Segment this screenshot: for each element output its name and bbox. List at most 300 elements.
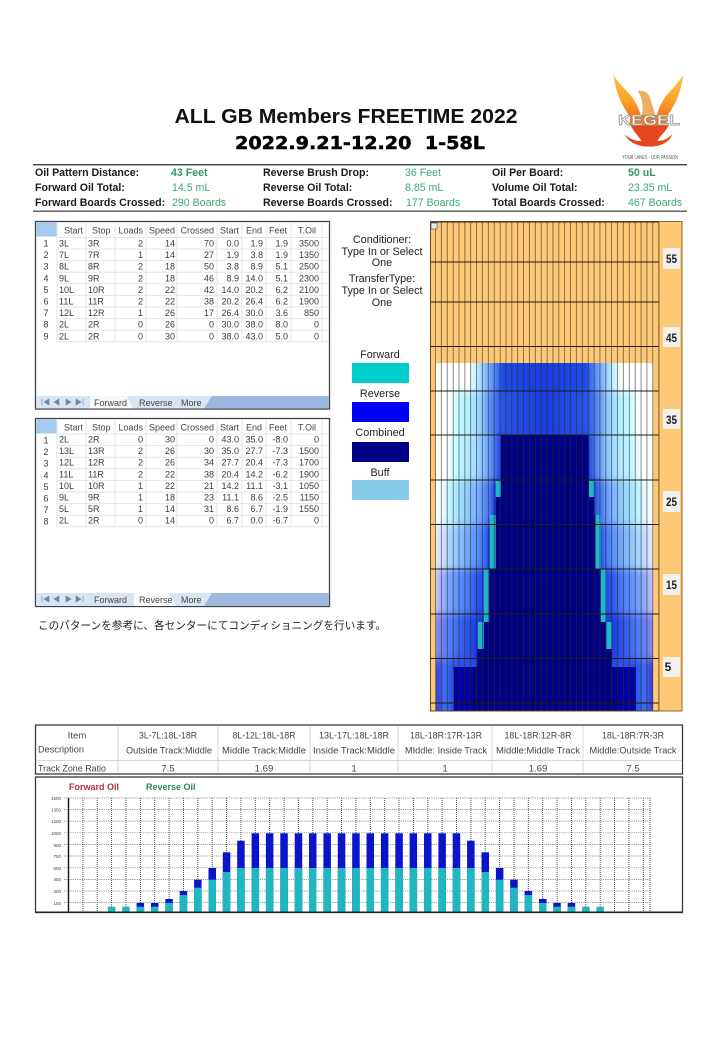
conditioner label: One [372, 257, 392, 269]
legend: combined [352, 427, 409, 462]
oil density bands [436, 363, 653, 710]
forward rows: 5 [43, 285, 49, 295]
stat: forward oil total [35, 182, 210, 194]
forward rows: 0 [209, 320, 214, 330]
reverse rows: 6.7 [250, 504, 263, 514]
column: inside track right: 18L-18R:17R-13R [410, 730, 482, 742]
forward rows: 1 [138, 308, 143, 318]
track zone ratio table [36, 725, 682, 774]
stat: volume oil total [492, 182, 672, 194]
forward rows: 22 [165, 285, 175, 295]
forward rows: 9R [88, 273, 100, 283]
reverse rows: 43.0 [221, 434, 239, 444]
stat: oil pattern distance: 43 Feet [171, 167, 208, 179]
lane oil graph [430, 221, 682, 740]
column: inside track left: Inside Track:Middle [313, 746, 395, 756]
forward rows: 2 [43, 250, 49, 260]
reverse rows: 2R [88, 516, 100, 526]
forward rows: 27 [204, 250, 214, 260]
legend: buff: Buff [370, 467, 391, 479]
forward rows: 1.9 [275, 238, 288, 248]
column: outside track left [126, 730, 212, 774]
reverse rows: 31 [204, 504, 214, 514]
forward rows: 7 [43, 308, 49, 318]
forward-only edge strips [478, 481, 612, 649]
reverse rows: -3.1 [272, 481, 288, 491]
y axis labels: 1350 [51, 808, 61, 812]
forward rows: 3 [43, 262, 49, 272]
forward rows: 1350 [299, 250, 319, 260]
stat: oil pattern distance [35, 167, 208, 179]
sheet tabs: reverse active [36, 593, 329, 606]
reverse rows: 2 [138, 458, 143, 468]
reverse rows: 0 [314, 516, 319, 526]
reverse rows: 9R [88, 492, 100, 502]
reverse rows: 1 [138, 481, 143, 491]
reverse rows: 14.2 [221, 481, 239, 491]
forward rows: 3500 [299, 238, 319, 248]
stat: reverse boards crossed: 177 Boards [406, 197, 460, 209]
sheet tabs: reverse active: Forward [94, 595, 127, 605]
column: inside track left [313, 730, 395, 774]
stat: total boards crossed: Total Boards Crossed: [492, 197, 605, 209]
row labels: Track Zone Ratio [38, 764, 106, 774]
forward rows: 5.1 [275, 262, 288, 272]
reverse rows: 0 [314, 434, 319, 444]
forward rows: 3.8 [250, 250, 263, 260]
stat: reverse oil total: Reverse Oil Total: [263, 182, 352, 194]
reverse rows: 14 [165, 516, 175, 526]
reverse rows: 1900 [299, 469, 319, 479]
reverse oil bars [137, 833, 575, 912]
column: inside track left: 1 [351, 764, 357, 774]
panel: oil bar chart [36, 777, 682, 912]
forward rows: 5.0 [275, 331, 288, 341]
forward rows: 2 [138, 273, 143, 283]
forward rows: 14 [165, 250, 175, 260]
combined oil core [454, 435, 636, 711]
forward rows: 20.2 [245, 285, 263, 295]
stat: reverse boards crossed [263, 197, 460, 209]
stat: forward oil total: 14.5 mL [172, 182, 210, 194]
reverse rows: 13L [59, 446, 74, 456]
forward rows: 9 [43, 331, 49, 341]
forward rows: 8 [43, 320, 49, 330]
forward oil bars [108, 868, 604, 912]
distance markers: 15 [666, 578, 677, 592]
forward rows: 4 [43, 273, 49, 283]
forward rows: 8R [88, 262, 100, 272]
header row: End [246, 422, 262, 432]
column: inside track right: MIddle: Inside Track [405, 746, 487, 756]
column: middle track right: Middle:Middle Track [496, 746, 580, 756]
forward rows: 6.2 [275, 296, 288, 306]
reverse rows: 1 [138, 504, 143, 514]
forward rows: 2L [59, 320, 69, 330]
forward rows [43, 238, 319, 341]
header row: T.Oil [298, 422, 316, 432]
forward rows: 50 [204, 262, 214, 272]
y axis labels: 750 [53, 854, 61, 859]
stat: oil per board: 50 uL [628, 167, 656, 179]
forward rows: 6.2 [275, 285, 288, 295]
stat: forward boards crossed: Forward Boards Crossed: [35, 197, 165, 209]
forward rows: 30.0 [245, 308, 263, 318]
sheet tabs: reverse active: More [181, 595, 202, 605]
stat: forward boards crossed: 290 Boards [172, 197, 226, 209]
reverse rows: 5L [59, 504, 69, 514]
reverse rows: 2L [59, 434, 69, 444]
reverse rows: 35.0 [221, 446, 239, 456]
forward rows: 26 [165, 308, 175, 318]
forward rows: 0.0 [226, 238, 239, 248]
forward rows: 70 [204, 238, 214, 248]
stat: forward oil total: Forward Oil Total: [35, 182, 125, 194]
conditioner label: Conditioner: [353, 234, 411, 246]
stat: volume oil total: Volume Oil Total: [492, 182, 578, 194]
forward rows: 2300 [299, 273, 319, 283]
forward rows: 22 [165, 296, 175, 306]
reverse rows: 1 [43, 436, 49, 446]
y axis labels: 1200 [51, 819, 61, 824]
forward rows: 2 [138, 238, 143, 248]
column: inside track left: 13L-17L:18L-18R [319, 730, 389, 742]
forward rows: 17 [204, 308, 214, 318]
transfer type label: Type In or Select [341, 285, 423, 297]
reverse rows: 6.7 [226, 516, 239, 526]
chart legend [69, 782, 196, 792]
reverse rows: -1.9 [272, 504, 288, 514]
gridlines [64, 798, 650, 903]
stat: reverse brush drop: 36 Feet [405, 167, 441, 179]
forward rows: 20.2 [221, 296, 239, 306]
reverse rows: 1500 [299, 446, 319, 456]
header row: Loads [118, 226, 143, 236]
reverse rows: 2R [88, 434, 100, 444]
distance markers: 55 [666, 252, 677, 266]
stat: reverse brush drop: Reverse Brush Drop: [263, 167, 369, 179]
forward rows: 1 [43, 238, 49, 248]
reverse rows: 0 [209, 434, 214, 444]
sheet tabs: forward active: More [181, 398, 202, 408]
sheet tabs: reverse active: Reverse [139, 595, 173, 605]
stat: total boards crossed: 467 Boards [628, 197, 682, 209]
forward rows: 14.0 [245, 273, 263, 283]
chart legend: Reverse Oil [146, 782, 196, 792]
reverse rows: 0.0 [250, 516, 263, 526]
reverse rows: -7.3 [272, 458, 288, 468]
logo: Kegel phoenix: YOUR LANES · OUR PASSION [622, 155, 678, 161]
y axis labels: 450 [53, 877, 61, 882]
column: outside track left: 3L-7L:18L-18R [139, 730, 197, 742]
forward rows: 0 [314, 331, 319, 341]
forward rows: 46 [204, 273, 214, 283]
row labels: Item [68, 730, 86, 742]
column: middle track left: Middle Track:Middle [222, 746, 306, 756]
forward rows: 3.8 [226, 262, 239, 272]
stat: reverse oil total: 8.85 mL [405, 182, 443, 194]
forward rows: 14.0 [221, 285, 239, 295]
header row: Start [64, 422, 84, 432]
header row: Crossed [180, 422, 214, 432]
conditioner label [341, 234, 423, 269]
reverse rows: 34 [204, 458, 214, 468]
logo: Kegel phoenix [613, 75, 683, 161]
forward rows: 38.0 [245, 320, 263, 330]
legend: buff [352, 467, 409, 500]
sheet tabs: forward active [36, 396, 329, 408]
transfer type label [341, 273, 423, 309]
stat: reverse boards crossed: Reverse Boards Crossed: [263, 197, 393, 209]
reverse rows: 38 [204, 469, 214, 479]
header row: Crossed [180, 226, 214, 236]
legend: reverse: Reverse [360, 388, 400, 400]
distance markers: 45 [666, 331, 677, 345]
column: inside track right [405, 730, 487, 774]
forward rows: 11L [59, 296, 73, 306]
reverse rows: 18 [165, 492, 175, 502]
reverse rows: 2 [138, 469, 143, 479]
header row: Stop [92, 226, 111, 236]
forward rows: 1.9 [226, 250, 239, 260]
header row: T.Oil [298, 226, 316, 236]
sheet tabs: forward active: Reverse [139, 398, 173, 408]
subtitle: date range and lanes: 2022.9.21-12.20 1-58L [235, 134, 485, 154]
header row: Feet [269, 226, 287, 236]
legend: combined: Combined [355, 427, 405, 439]
column: outside track left: Outside Track:Middle [126, 746, 212, 756]
y axis labels: 900 [53, 843, 61, 848]
forward rows: 10L [59, 285, 74, 295]
forward rows: 12R [88, 308, 105, 318]
reverse rows: 23 [204, 492, 214, 502]
reverse rows: 11.1 [222, 492, 239, 502]
reverse rows: 11L [59, 469, 73, 479]
forward rows: 3L [59, 238, 69, 248]
forward rows: 8.9 [250, 262, 263, 272]
column: middle track left: 8L-12L:18L-18R [232, 730, 296, 742]
y axis labels: 1050 [51, 831, 61, 836]
forward rows: 1.9 [250, 238, 263, 248]
forward rows: 3R [88, 238, 100, 248]
reverse rows: 1700 [299, 458, 319, 468]
forward rows: 0 [138, 320, 143, 330]
header row: Feet [269, 422, 287, 432]
header row: Start [220, 422, 239, 432]
legend: reverse [352, 388, 409, 422]
header row: Speed [149, 226, 175, 236]
conditioner label: Type In or Select [341, 246, 423, 258]
reverse rows: 1050 [299, 481, 319, 491]
header row: Start [64, 226, 84, 236]
forward rows: 26.4 [245, 296, 263, 306]
forward rows: 18 [165, 262, 175, 272]
forward rows: 7R [88, 250, 100, 260]
forward rows: 0 [138, 331, 143, 341]
reverse rows: -2.5 [272, 492, 288, 502]
forward rows: 2L [59, 331, 69, 341]
forward rows: 38 [204, 296, 214, 306]
reverse rows: 5 [43, 482, 49, 492]
reverse rows: 26 [165, 458, 175, 468]
reverse rows: 1550 [299, 504, 319, 514]
header row: Start [220, 226, 239, 236]
forward rows: 850 [304, 308, 319, 318]
forward rows: 11R [88, 296, 104, 306]
distance markers: 5 [665, 660, 672, 674]
forward rows: 26 [165, 320, 175, 330]
transfer type label: One [372, 297, 392, 309]
header row: Loads [118, 422, 143, 432]
column: middle track right: 1.69 [529, 764, 547, 774]
reverse rows: 2 [138, 446, 143, 456]
column: outside track left: 7.5 [161, 764, 175, 774]
reverse rows: 6 [43, 494, 49, 504]
forward rows: 2 [138, 262, 143, 272]
forward rows: 2100 [299, 285, 319, 295]
forward rows: 0 [209, 331, 214, 341]
forward rows: 30.0 [221, 320, 239, 330]
forward rows: 2R [88, 331, 100, 341]
stat: reverse oil total [263, 182, 443, 194]
reverse rows [43, 434, 319, 527]
reverse rows: 4 [43, 470, 49, 480]
forward rows: 1.9 [275, 250, 288, 260]
transfer type label: TransferType: [349, 273, 415, 285]
forward rows: 30 [165, 331, 175, 341]
reverse rows: 35.0 [245, 434, 263, 444]
distance markers [663, 248, 680, 677]
panel: reverse table [36, 418, 330, 606]
forward rows: 26.4 [221, 308, 239, 318]
reverse rows: 20.4 [245, 458, 263, 468]
reverse rows: 1150 [300, 492, 319, 502]
reverse rows: 0 [209, 516, 214, 526]
column: middle track right [496, 730, 580, 774]
column: inside track right: 1 [442, 764, 448, 774]
forward rows: 18 [165, 273, 175, 283]
forward rows: 0 [314, 320, 319, 330]
column: outside track right: 7.5 [626, 764, 640, 774]
stat: total boards crossed [492, 197, 682, 209]
reverse rows: 9L [59, 492, 69, 502]
column: middle track right: 18L-18R:12R-8R [504, 730, 572, 742]
reverse rows: -6.2 [272, 469, 288, 479]
reverse rows: 0 [138, 434, 143, 444]
reverse rows: 30 [165, 434, 175, 444]
reverse rows: 3 [43, 459, 49, 469]
reverse rows: 12R [88, 458, 105, 468]
reverse rows: -6.7 [272, 516, 288, 526]
header row [64, 226, 316, 236]
reverse rows: 14.2 [245, 469, 263, 479]
reverse rows: 21 [204, 481, 214, 491]
sheet tabs: forward active: Forward [94, 398, 127, 408]
reverse rows: 12L [59, 458, 74, 468]
forward rows: 2 [138, 296, 143, 306]
forward rows: 10R [88, 285, 105, 295]
reverse rows: 8.6 [250, 492, 263, 502]
reverse rows: 0 [138, 516, 143, 526]
column: middle track left [222, 730, 306, 774]
stat: volume oil total: 23.35 mL [628, 182, 672, 194]
forward rows: 8L [59, 262, 69, 272]
title: ALL GB Members FREETIME 2022 [174, 106, 518, 128]
column: middle track left: 1.69 [255, 764, 273, 774]
reverse rows: 2 [43, 447, 49, 457]
stat: oil per board: Oil Per Board: [492, 167, 563, 179]
stat: oil pattern distance: Oil Pattern Distance: [35, 167, 139, 179]
row labels [38, 730, 106, 774]
stats header block [33, 164, 687, 212]
forward rows: 14 [165, 238, 175, 248]
reverse rows: -7.3 [272, 446, 288, 456]
header row: End [246, 226, 262, 236]
reverse rows: 5R [88, 504, 100, 514]
reverse rows: 26 [165, 446, 175, 456]
y axis labels: 300 [53, 889, 61, 894]
header row: Speed [149, 422, 175, 432]
reverse rows: 10R [88, 481, 105, 491]
reverse rows: -8.0 [272, 434, 288, 444]
legend: forward [352, 349, 409, 383]
logo: Kegel phoenix: KEGEL [618, 112, 680, 129]
reverse rows: 13R [88, 446, 105, 456]
distance markers: 35 [666, 413, 677, 427]
forward rows: 5.1 [275, 273, 288, 283]
outer reverse blocks [454, 667, 636, 711]
y axis labels: 150 [53, 901, 61, 906]
forward rows: 43.0 [245, 331, 263, 341]
header row: Stop [92, 422, 111, 432]
reverse rows: 27.7 [221, 458, 239, 468]
panel: forward table [36, 222, 330, 409]
y axis labels: 1500 [51, 796, 61, 801]
forward rows: 2R [88, 320, 100, 330]
reverse rows: 2L [59, 516, 69, 526]
column: outside track right [590, 730, 677, 774]
header row [64, 422, 316, 432]
reverse rows: 11.1 [246, 481, 263, 491]
forward rows: 1900 [299, 296, 319, 306]
chart legend: Forward Oil [69, 782, 119, 792]
reverse rows: 1 [138, 492, 143, 502]
note: conditioning notice: このパターンを参考に、各センターにてコンディショニングを行います。 [38, 619, 386, 632]
forward rows: 6 [43, 296, 49, 306]
reverse rows: 7 [43, 505, 49, 515]
legend: forward: Forward [360, 349, 400, 361]
forward rows: 8.9 [226, 273, 239, 283]
reverse rows: 11R [88, 469, 104, 479]
forward rows: 9L [59, 273, 69, 283]
reverse rows: 14 [165, 504, 175, 514]
stat: forward boards crossed [35, 197, 226, 209]
stat: oil per board [492, 167, 656, 179]
forward rows: 2 [138, 285, 143, 295]
reverse rows: 10L [59, 481, 74, 491]
forward rows: 42 [204, 285, 214, 295]
column: outside track right: Middle:Outside Track [590, 746, 677, 756]
y axis labels: 600 [53, 866, 61, 871]
row labels: Description [38, 744, 84, 756]
reverse rows: 30 [204, 446, 214, 456]
reverse rows: 22 [165, 481, 175, 491]
reverse rows: 20.4 [221, 469, 239, 479]
forward rows: 3.6 [275, 308, 288, 318]
reverse rows: 27.7 [245, 446, 263, 456]
stat: reverse brush drop [263, 167, 441, 179]
forward rows: 38.0 [221, 331, 239, 341]
